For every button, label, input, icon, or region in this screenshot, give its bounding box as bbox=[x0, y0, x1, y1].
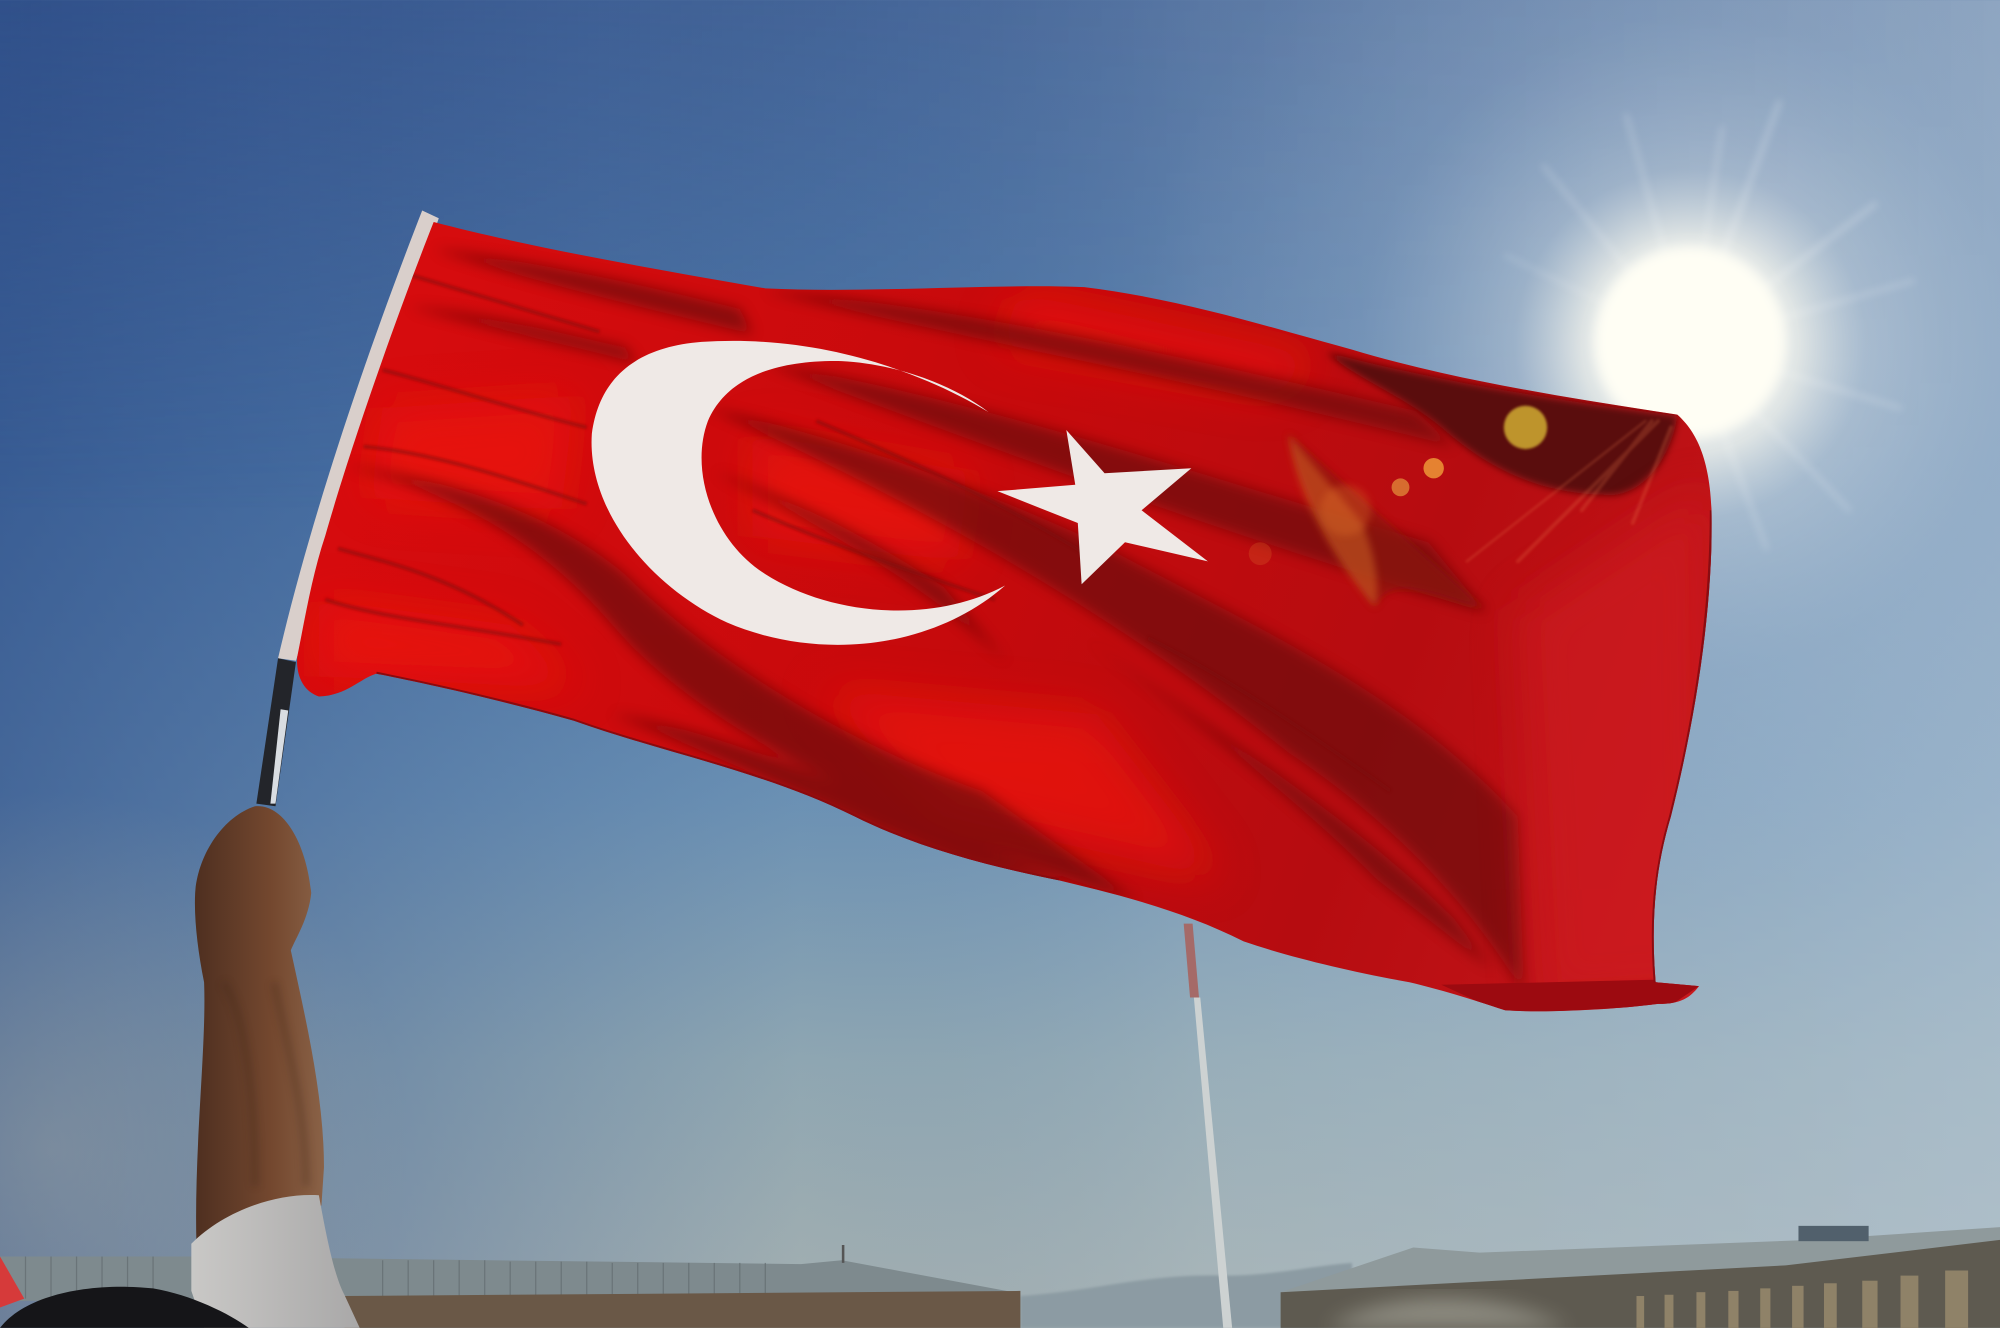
distant hills bbox=[1020, 1263, 1352, 1328]
sun rays across flag bbox=[1467, 421, 1671, 561]
dark fold shadows bbox=[344, 249, 1524, 995]
flag pole sleeve bbox=[278, 211, 439, 661]
bottom dark hem bbox=[1441, 980, 1699, 1014]
sleeve bbox=[191, 1195, 360, 1328]
lit right side bbox=[1518, 485, 1716, 1008]
dark corner near sun bbox=[1327, 352, 1677, 495]
distant flagpole bbox=[1184, 924, 1232, 1328]
small red flag corner at bottom left bbox=[0, 1256, 24, 1307]
left building with roof bbox=[0, 1245, 1020, 1328]
dark head silhouette bbox=[0, 1287, 249, 1328]
sun glow and rays bbox=[1142, 0, 2000, 893]
lens flare spots bbox=[1249, 406, 1547, 607]
raised arm with fist bbox=[195, 806, 324, 1244]
white star bbox=[997, 430, 1208, 584]
right building with colonnade bbox=[1281, 1226, 2000, 1328]
bright red patches bbox=[319, 293, 1327, 880]
flag edge stroke bbox=[1654, 510, 1712, 982]
red flag cloth bbox=[297, 222, 1712, 1012]
white crescent bbox=[592, 341, 1005, 645]
flag pole handle bbox=[256, 658, 296, 806]
thin wrinkles on hoist side bbox=[324, 273, 1030, 647]
shadowed lens wedge bbox=[1288, 434, 1486, 610]
